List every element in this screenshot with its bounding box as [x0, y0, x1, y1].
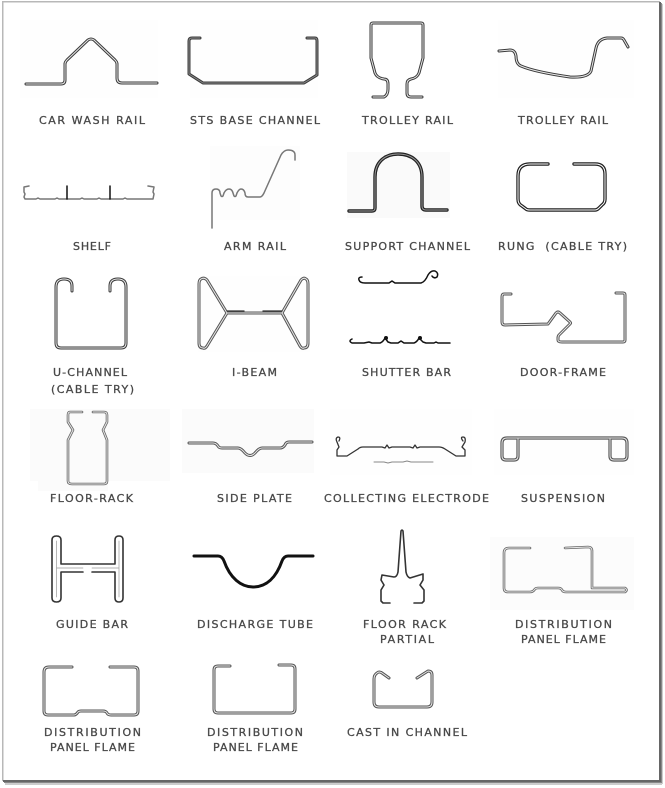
label line 2: PANEL FLAME	[213, 741, 298, 754]
item: rung cable tray	[498, 164, 627, 253]
label: I-BEAM	[232, 366, 277, 379]
item: trolley rail 2	[499, 38, 628, 127]
label: ARM RAIL	[224, 240, 287, 253]
item: door-frame	[502, 293, 625, 379]
item: I-beam	[199, 278, 308, 379]
icon: I-beam profile	[199, 278, 308, 348]
label: SHELF	[73, 240, 111, 253]
item: cast in channel	[347, 671, 468, 739]
item: shutter bar	[350, 271, 451, 379]
label: TROLLEY RAIL	[517, 114, 609, 127]
item: floor rack partial	[363, 530, 447, 646]
icon: STS base channel profile	[189, 38, 317, 83]
icon: cast in channel profile	[374, 671, 432, 707]
label: FLOOR-RACK	[50, 492, 134, 505]
item: guide bar	[52, 536, 128, 631]
label: STS BASE CHANNEL	[190, 114, 321, 127]
icon: support channel profile	[349, 154, 447, 211]
label: SHUTTER BAR	[362, 366, 451, 379]
label: U-CHANNEL	[53, 366, 128, 379]
item: discharge tube	[194, 556, 313, 631]
label line 2: (CABLE TRY)	[51, 383, 134, 396]
icon: distribution panel profile with tail	[504, 547, 626, 592]
icon: trolley rail profile	[371, 23, 423, 97]
icon: floor-rack profile	[68, 412, 107, 484]
icon: arm rail profile	[212, 150, 295, 228]
icon: rung profile	[518, 164, 605, 210]
icon: trolley rail profile	[499, 38, 628, 77]
icon: collecting electrode profile	[336, 437, 465, 463]
item: U-channel	[51, 279, 134, 396]
label: SUPPORT CHANNEL	[345, 240, 471, 253]
label: SIDE PLATE	[217, 492, 292, 505]
icon: floor rack partial profile	[381, 530, 424, 603]
item: distribution panel flame with tail	[504, 547, 626, 646]
item: arm rail	[212, 150, 295, 253]
label: DISTRIBUTION	[207, 726, 303, 739]
icon: distribution panel profile with raised base	[44, 667, 138, 715]
label: DISTRIBUTION	[515, 618, 612, 631]
icon: shutter bar upper profile	[359, 271, 438, 283]
item: car wash rail	[26, 39, 157, 127]
label: FLOOR RACK	[363, 618, 447, 631]
item: floor-rack	[50, 412, 134, 505]
item: side plate	[189, 442, 312, 505]
label: SUSPENSION	[521, 492, 605, 505]
label: TROLLEY RAIL	[361, 114, 454, 127]
icon: door-frame profile	[502, 293, 625, 342]
label: RUNG (CABLE TRY)	[498, 240, 627, 253]
icon: guide bar profile	[52, 536, 123, 602]
icon: shutter bar lower profile	[350, 336, 450, 343]
item: shelf	[24, 186, 154, 253]
item: trolley rail 1	[361, 23, 454, 127]
item: support channel	[345, 154, 471, 253]
icon: distribution panel profile	[214, 665, 295, 713]
icon: discharge tube profile	[194, 556, 313, 587]
icon: car wash rail profile	[26, 39, 157, 84]
label: CAR WASH RAIL	[39, 114, 146, 127]
label: CAST IN CHANNEL	[347, 726, 468, 739]
label: GUIDE BAR	[56, 618, 128, 631]
item: distribution panel flame middle	[207, 665, 303, 754]
icon: side plate profile	[189, 442, 312, 456]
icon: shelf profile	[24, 186, 154, 199]
label: DISTRIBUTION	[44, 726, 141, 739]
label: DOOR-FRAME	[520, 366, 606, 379]
label: COLLECTING ELECTRODE	[324, 492, 489, 505]
label line 2: PANEL FLAME	[521, 633, 606, 646]
item: collecting electrode	[324, 437, 489, 505]
icon: suspension profile	[502, 438, 627, 460]
item: suspension	[502, 438, 627, 505]
icon: U-channel profile	[56, 279, 126, 348]
label: DISCHARGE TUBE	[197, 618, 313, 631]
label line 2: PANEL FLAME	[50, 741, 135, 754]
item: distribution panel flame left	[44, 667, 141, 754]
label line 2: PARTIAL	[380, 633, 435, 646]
item: STS base channel	[189, 38, 321, 127]
